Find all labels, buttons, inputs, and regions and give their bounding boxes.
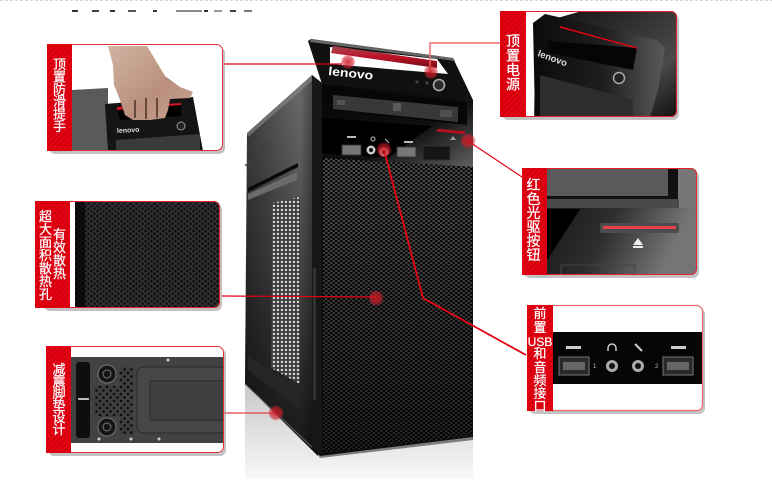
- cropped heading text: [72, 10, 252, 12]
- side logo: lenovo: [244, 140, 272, 172]
- panel: top power button: [500, 11, 679, 120]
- front upper face: [322, 83, 473, 167]
- label strip: [527, 305, 553, 414]
- label strip: 电: [506, 62, 520, 78]
- label strip: 防: [53, 82, 66, 97]
- label strip: 散: [53, 253, 66, 268]
- label strip: [46, 346, 71, 453]
- label strip: 顶: [53, 57, 66, 72]
- label strip: [500, 11, 526, 117]
- mesh: [323, 158, 472, 453]
- front face: [312, 75, 473, 456]
- floor reflection: [245, 385, 473, 479]
- port panel: [322, 118, 450, 160]
- label strip: 置: [506, 48, 520, 64]
- label strip: [47, 44, 72, 151]
- label strip: 提: [53, 107, 66, 122]
- label strip: 有: [53, 227, 66, 242]
- label strip: 光: [526, 205, 540, 221]
- label strip: 音: [533, 360, 547, 375]
- label strip: 顶: [506, 33, 520, 49]
- optical drive: [331, 88, 467, 125]
- label strip: 散: [39, 261, 52, 276]
- label strip: 大: [39, 222, 52, 237]
- label strip: 源: [506, 76, 520, 92]
- marker dots: [268, 55, 476, 420]
- label strip: 驱: [526, 219, 540, 235]
- label strip: 手: [53, 119, 66, 134]
- label strip: 孔: [39, 287, 52, 302]
- eject button: [437, 129, 465, 140]
- leader lines: [222, 43, 526, 413]
- label strip: 面: [39, 235, 52, 250]
- panel: red optical drive button: [522, 168, 699, 278]
- label strip: 滑: [53, 94, 66, 109]
- label strip: 频: [533, 373, 547, 388]
- panel: shock-absorbing feet: [46, 346, 230, 456]
- label strip: 钮: [526, 247, 540, 263]
- label strip: [522, 168, 547, 275]
- side-front slits: [313, 268, 316, 400]
- power button: [415, 80, 444, 90]
- label strip: 热: [53, 266, 66, 281]
- label strip: [35, 201, 70, 308]
- label strip: 超: [39, 209, 52, 224]
- computer tower: [244, 39, 473, 479]
- label strip: 前: [533, 306, 547, 321]
- side foot panel: [248, 355, 298, 407]
- panel: front USB and audio ports: [527, 305, 705, 414]
- label strip: 效: [53, 240, 66, 255]
- side vent: [271, 197, 300, 384]
- panel: top power button: lenovo: [536, 48, 569, 69]
- label strip: 计: [52, 422, 66, 437]
- label strip: 积: [39, 248, 52, 263]
- label strip: 热: [39, 274, 52, 289]
- panel: top anti-slip handle: [47, 44, 225, 154]
- lenovo logo: lenovo: [328, 64, 374, 83]
- label strip: USB: [528, 335, 552, 349]
- top handle: [308, 39, 473, 100]
- label strip: 垫: [52, 398, 66, 413]
- side slot: [248, 163, 298, 192]
- label strip: 色: [526, 191, 540, 207]
- floor shadow: [312, 436, 473, 458]
- label strip: 和: [533, 346, 547, 361]
- label strip: 震: [52, 374, 66, 389]
- label strip: 口: [533, 399, 547, 414]
- label strip: 减: [52, 362, 66, 377]
- label strip: 脚: [52, 386, 66, 401]
- side panel: [244, 75, 318, 456]
- panel: front USB and audio ports: 2: [655, 364, 659, 370]
- top dashed border: [0, 0, 772, 2]
- label strip: 设: [52, 410, 66, 425]
- label strip: 接: [533, 386, 547, 401]
- label strip: 红: [526, 177, 540, 193]
- label strip: 置: [53, 69, 66, 84]
- label strip: 按: [526, 233, 540, 249]
- label strip: 置: [533, 320, 547, 335]
- panel: front USB and audio ports: 1: [593, 364, 597, 370]
- panel: large heat vents: [35, 201, 222, 311]
- panel: top anti-slip handle: lenovo: [117, 127, 140, 135]
